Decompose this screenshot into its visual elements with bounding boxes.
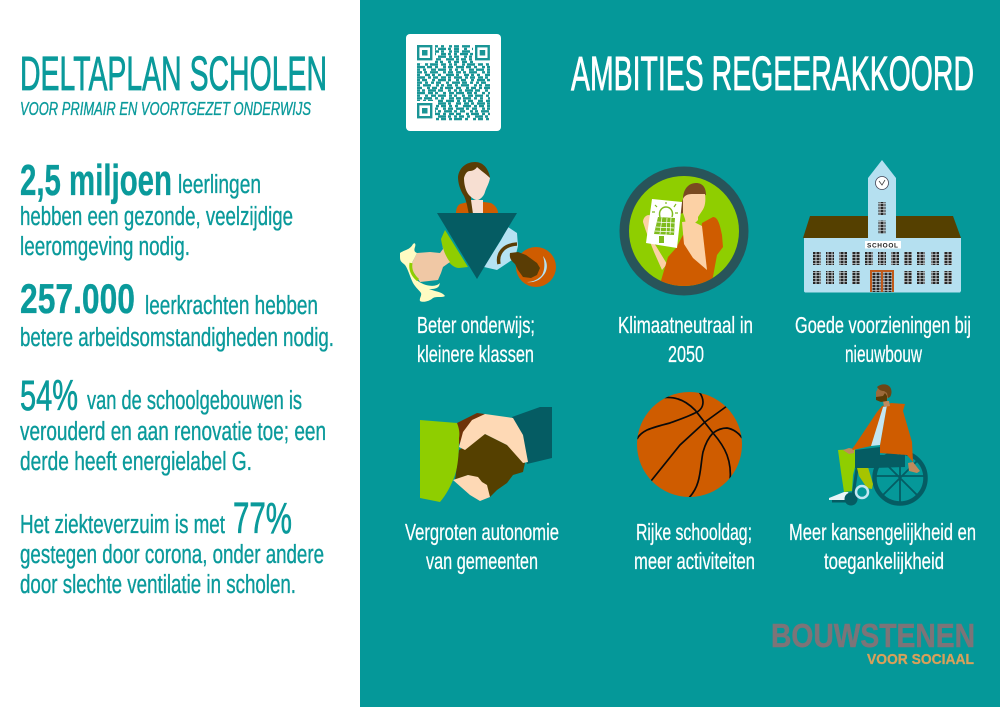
icon: man in wheelchair [829, 384, 926, 506]
label: Goede voorzieningen: nieuwbouw [845, 341, 922, 367]
label: Klimaatneutraal: Klimaatneutraal in [618, 312, 753, 338]
text block: 2,5 miljoen leerlingen: leeromgeving nodig. [20, 233, 190, 261]
text block: 2,5 miljoen leerlingen [20, 156, 293, 261]
label: Beter onderwijs [417, 312, 535, 367]
text block: 54% schoolgebouwen: verouderd en aan renovatie toe; een [20, 418, 326, 446]
label: Beter onderwijs: Beter onderwijs; [417, 312, 535, 338]
text block: 2,5 miljoen leerlingen: leerlingen [178, 171, 261, 199]
text block: 54% schoolgebouwen [20, 372, 326, 476]
text block: 257.000 leerkrachten [20, 275, 334, 352]
QR code [406, 34, 501, 131]
text block: 257.000 leerkrachten: 257.000 [20, 275, 135, 322]
text block: ziekteverzuim 77%: 77% [233, 494, 292, 543]
label: Rijke schooldag: Rijke schooldag; [636, 519, 752, 545]
label: Beter onderwijs: kleinere klassen [417, 341, 534, 367]
icon: woman with solar panel drawing in circle [620, 166, 748, 296]
logo: Bouwstenen voor sociaal: VOOR SOCIAAL [867, 651, 974, 668]
icon: basketball [637, 390, 742, 500]
panel: left background [0, 0, 360, 707]
text block: ziekteverzuim 77%: gestegen door corona, onder andere [20, 541, 324, 569]
text block: 54% schoolgebouwen: van de schoolgebouwen is [87, 387, 302, 415]
text block: ziekteverzuim 77%: Het ziekteverzuim is met [20, 511, 225, 539]
label: Rijke schooldag: meer activiteiten [634, 548, 755, 574]
text block: ziekteverzuim 77%: door slechte ventilatie in scholen. [20, 571, 296, 599]
text block: ziekteverzuim 77% [20, 494, 324, 599]
label: Klimaatneutraal: 2050 [668, 341, 704, 367]
label: Vergroten autonomie [405, 519, 559, 574]
logo: Bouwstenen voor sociaal [771, 617, 975, 668]
icon: three people around triangle [400, 162, 556, 302]
text block: 54% schoolgebouwen: 54% [20, 372, 78, 420]
label: Vergroten autonomie: van gemeenten [426, 548, 538, 574]
title: Deltaplan Scholen: DELTAPLAN SCHOLEN [20, 48, 327, 101]
text block: 2,5 miljoen leerlingen: 2,5 miljoen [20, 156, 172, 205]
text block: 54% schoolgebouwen: derde heeft energielabel G. [20, 448, 252, 476]
panel: right background [360, 0, 1000, 707]
label: Vergroten autonomie: Vergroten autonomie [405, 519, 559, 545]
icon: school building: SCHOOL [867, 242, 898, 250]
icon: handshake [420, 407, 552, 502]
text block: 257.000 leerkrachten: betere arbeidsomstandigheden nodig. [20, 324, 334, 352]
label: Klimaatneutraal [618, 312, 753, 367]
label: Meer kansengelijkheid: toegankelijkheid [824, 548, 944, 574]
text block: 2,5 miljoen leerlingen: hebben een gezonde, veelzijdige [20, 203, 293, 231]
icon: school building [803, 160, 961, 292]
subtitle: VOOR PRIMAIR EN VOORTGEZET ONDERWIJS [20, 99, 311, 119]
label: Rijke schooldag [634, 519, 755, 574]
text block: 257.000 leerkrachten: leerkrachten hebben [145, 292, 318, 320]
label: Goede voorzieningen [795, 312, 971, 367]
label: Meer kansengelijkheid [789, 519, 976, 574]
